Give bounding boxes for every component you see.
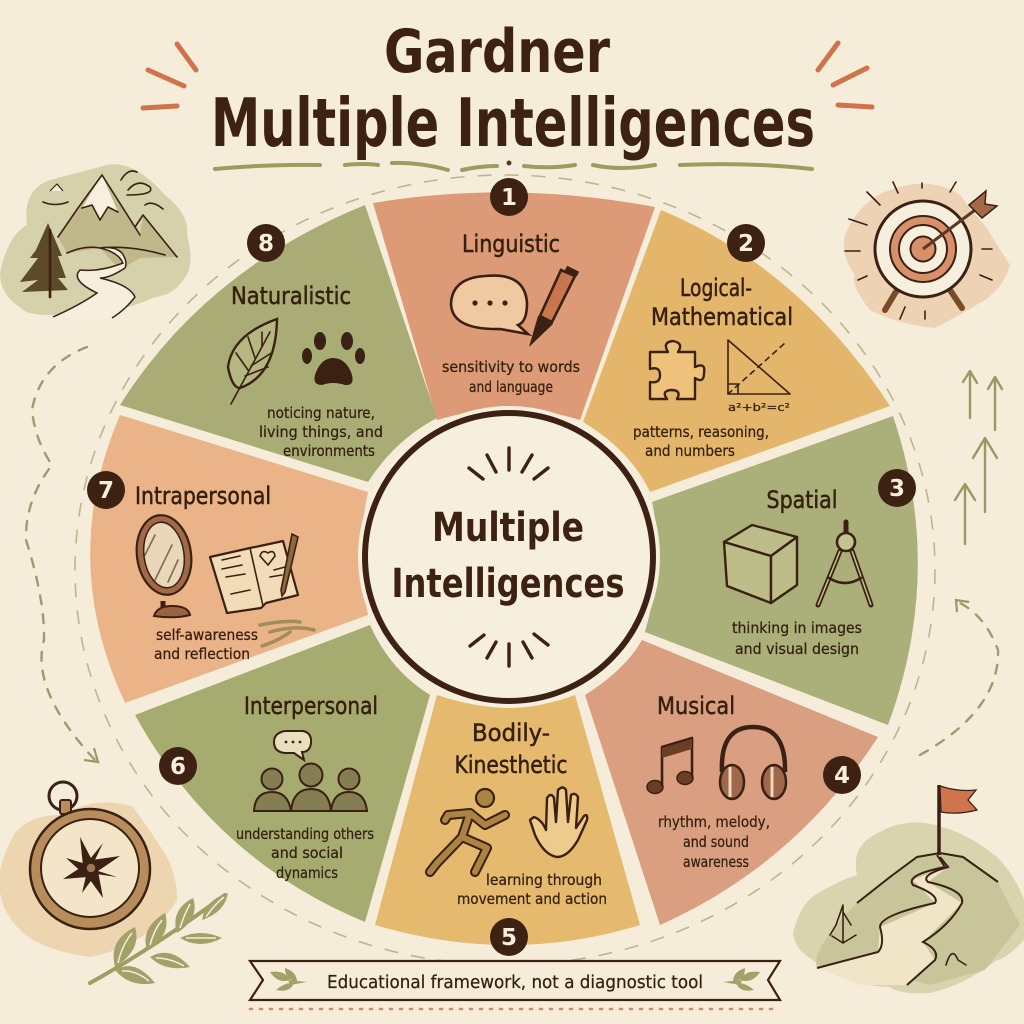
number badge 4 [823, 756, 861, 794]
heading: Logical-Mathematical: Logical- [680, 274, 752, 302]
panel: Bodily-Kinesthetic [375, 695, 640, 945]
text: Musical description: rhythm, melody, [658, 813, 770, 831]
title sparks right [818, 43, 872, 107]
text: Spatial description: thinking in images [732, 619, 862, 637]
heading: Interpersonal: Interpersonal [244, 692, 378, 720]
icon: compass drawing tool [818, 522, 871, 605]
icon: triangle diagram [728, 340, 790, 414]
panel: Naturalistic [120, 205, 437, 482]
icon: mirror [132, 512, 196, 617]
heading: Spatial: Spatial [766, 486, 838, 514]
icon: fountain pen [529, 268, 578, 347]
number badge 7: 7 [98, 478, 114, 504]
icon: music note [647, 738, 693, 794]
panel: Linguistic [373, 192, 655, 420]
number badge 3: 3 [889, 476, 905, 502]
number badge 6 [159, 747, 197, 785]
icon: cube [724, 525, 797, 603]
center circle: Intelligences [392, 561, 624, 607]
number badge 5 [490, 918, 528, 956]
icon: three people [254, 764, 367, 811]
text: Intrapersonal description: and reflection [154, 645, 250, 663]
number badge 2: 2 [738, 231, 754, 257]
text: Bodily-Kinesthetic description: movement and action [457, 890, 607, 908]
illustration: olive branch [90, 893, 228, 984]
dashed path left [26, 347, 98, 762]
panel: Spatial [645, 416, 918, 725]
decorative arrows up right [955, 371, 1002, 544]
illustration: target [844, 182, 1010, 328]
number badge 4: 4 [834, 763, 850, 789]
text: Logical-Mathematical description: patterns, reasoning, [633, 423, 769, 441]
title: Gardner [384, 17, 610, 87]
footer banner [250, 961, 780, 1009]
heading: Intrapersonal: Intrapersonal [135, 482, 271, 510]
icon: runner [430, 789, 505, 872]
text: Logical-Mathematical description: and numbers [645, 442, 735, 460]
text: Interpersonal description: understanding others [236, 825, 374, 843]
icon: leaf [228, 319, 277, 404]
text: Linguistic description: sensitivity to words [442, 358, 580, 376]
number badge 3 [878, 469, 916, 507]
text: Interpersonal description: dynamics [276, 864, 338, 882]
heading: Naturalistic: Naturalistic [231, 282, 351, 310]
heading: Bodily-Kinesthetic: Kinesthetic [454, 751, 568, 779]
icon: triangle diagram: a²+b²=c² [728, 401, 790, 414]
icon: small speech bubble [274, 731, 311, 760]
icon: headphones [720, 727, 786, 799]
number badge 1 [490, 178, 528, 216]
panel: Intrapersonal [90, 415, 368, 703]
illustration: hill with flag [793, 785, 1024, 993]
text: Musical description: and sound [683, 833, 749, 851]
dashed path right [920, 600, 998, 755]
center circle: Multiple [432, 505, 584, 551]
text: Linguistic description: and language [469, 378, 553, 396]
icon: open book and pencil [210, 534, 298, 613]
text: Musical description: awareness [683, 853, 749, 871]
illustration: compass [0, 782, 177, 957]
icon: hand [530, 788, 587, 857]
number badge 5: 5 [501, 925, 517, 951]
icon: speech bubble [451, 276, 528, 334]
illustration: mountains [0, 164, 191, 318]
wheel outer dashed ring [75, 175, 935, 965]
heading: Logical-Mathematical: Mathematical [651, 303, 793, 331]
text: Naturalistic description: living things, and [259, 423, 383, 441]
title [211, 17, 815, 162]
panel: Interpersonal [135, 625, 430, 922]
text: Interpersonal description: and social [271, 844, 343, 862]
title sparks left [143, 44, 196, 108]
heading: Linguistic: Linguistic [462, 230, 560, 258]
footer banner: Educational framework, not a diagnostic tool [327, 972, 703, 993]
text: Bodily-Kinesthetic description: learning through [486, 871, 602, 889]
icon: puzzle piece [650, 341, 704, 399]
title: Multiple Intelligences [211, 84, 815, 162]
text: Naturalistic description: environments [283, 442, 375, 460]
center circle [358, 406, 660, 708]
number badge 6: 6 [170, 754, 186, 780]
heading: Bodily-Kinesthetic: Bodily- [472, 719, 550, 747]
number badge 7 [87, 471, 125, 509]
title underline [215, 160, 812, 170]
number badge 1: 1 [501, 185, 517, 211]
text: Naturalistic description: noticing nature, [267, 404, 375, 422]
number badge 8: 8 [258, 231, 274, 257]
number badge 2 [727, 224, 765, 262]
panel: Musical [585, 640, 878, 925]
heading: Musical: Musical [657, 692, 735, 720]
panel: Logical-Mathematical [583, 210, 890, 492]
text: Spatial description: and visual design [735, 640, 859, 658]
number badge 8 [247, 224, 285, 262]
icon: paw print [302, 332, 365, 385]
smudge mark [260, 621, 314, 646]
text: Intrapersonal description: self-awareness [156, 626, 258, 644]
